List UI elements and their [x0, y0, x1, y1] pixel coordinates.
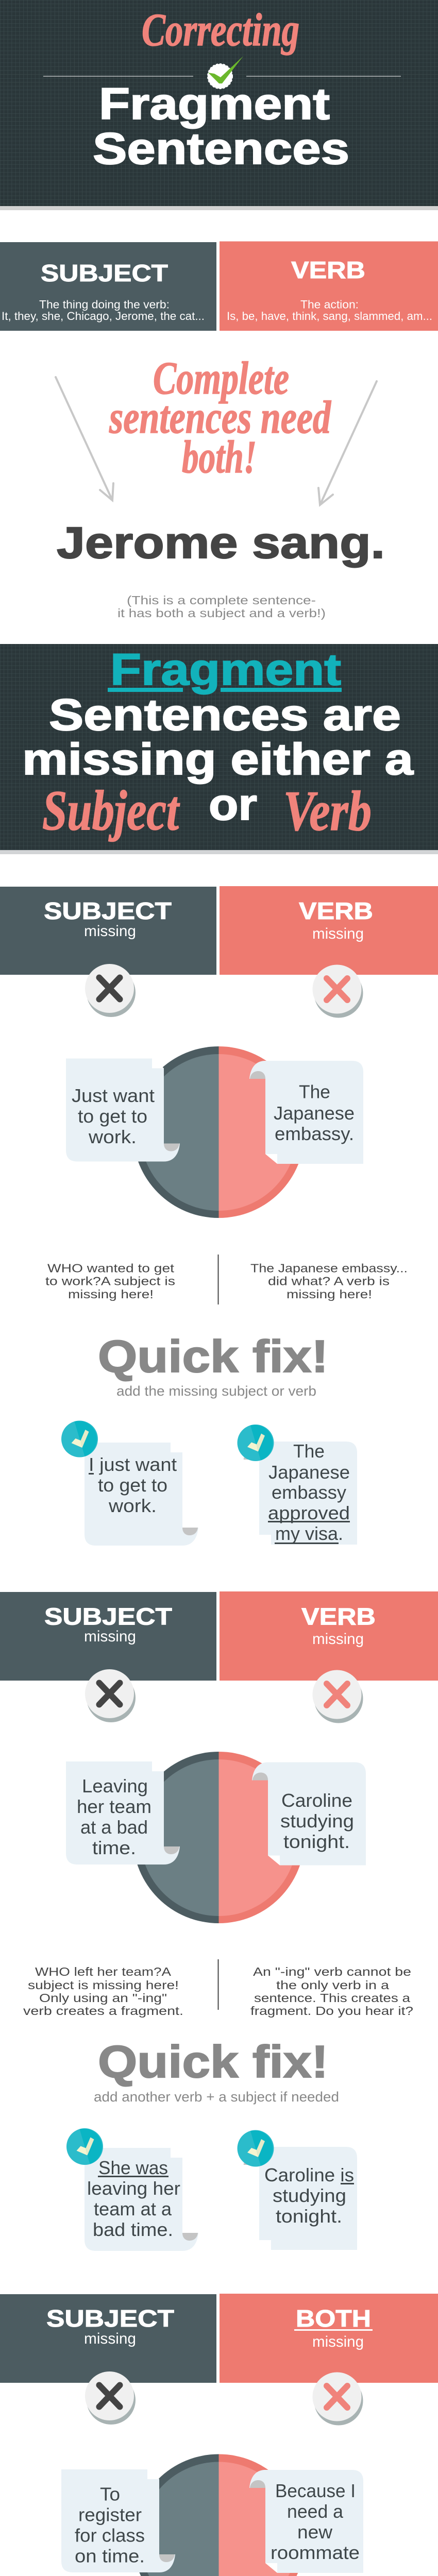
icon: teal check	[61, 1421, 98, 1457]
icon: x dark	[85, 2371, 136, 2425]
note: because I need a new roommate: need a	[287, 2501, 344, 2522]
heading text: Sentences are	[49, 690, 401, 740]
panel: subject missing 1	[0, 887, 216, 975]
fixed note: Caroline is studying tonight	[243, 2147, 357, 2250]
note: to register for class on time: To	[100, 2484, 120, 2505]
note: Caroline studying tonight: studying	[280, 1810, 354, 1832]
caption: who wanted to get to work: missing here!	[68, 1287, 154, 1301]
caption: an -ing verb cannot be the only verb: sentence. This creates a	[254, 1991, 410, 2005]
divider badge with green check	[43, 56, 401, 89]
caption: who wanted to get to work: WHO wanted to get	[47, 1261, 175, 1275]
panel: subject definition: The thing doing the verb:	[39, 298, 170, 311]
fixed note: she was leaving her team at a bad time: She was	[98, 2157, 168, 2178]
fixed note: she was leaving her team at a bad time: leaving her	[87, 2178, 180, 2199]
caption: an -ing verb cannot be the only verb	[250, 1965, 413, 2018]
note: because I need a new roommate: Because I	[275, 2480, 356, 2501]
panel: both missing: BOTH	[296, 2305, 371, 2332]
fixed note: the Japanese embassy approved my visa: my visa.	[275, 1523, 343, 1544]
panel: both missing	[220, 2294, 438, 2383]
caption: the Japanese embassy did what: did what? A verb is	[268, 1275, 390, 1288]
note: the Japanese embassy	[249, 1061, 363, 1164]
caption: who left her team: WHO left her team?A	[35, 1965, 172, 1978]
text: add another verb and a subject if needed: add another verb + a subject if needed	[94, 2089, 339, 2105]
heading text	[22, 690, 414, 784]
caption: who left her team: Only using an "-ing"	[39, 1991, 167, 2005]
fixed note: the Japanese embassy approved my visa	[243, 1440, 357, 1545]
caption: an -ing verb cannot be the only verb: fragment. Do you hear it?	[250, 2004, 413, 2018]
fixed note: Caroline is studying tonight: tonight.	[276, 2206, 342, 2227]
note: because I need a new roommate: new	[297, 2521, 333, 2543]
heading word: Fragment underlined: Fragment	[110, 645, 341, 694]
title: Correcting: Correcting	[142, 5, 299, 56]
heading: complete sentences need both: sentences need	[109, 392, 332, 443]
note: just want to get to work: work.	[88, 1126, 137, 1147]
panel: subject definition	[0, 242, 216, 331]
note: the Japanese embassy: Japanese	[274, 1103, 355, 1124]
note: leaving her team at a bad time	[66, 1761, 180, 1865]
fixed note: the Japanese embassy approved my visa: Japanese	[268, 1462, 350, 1483]
note: to register for class on time	[61, 2469, 175, 2572]
caption: who left her team: subject is missing here!	[28, 1978, 179, 1992]
panel: subject missing 2: SUBJECT	[44, 1603, 172, 1630]
note: leaving her team at a bad time: her team	[77, 1796, 151, 1817]
icon: x coral	[312, 2372, 363, 2426]
panel: subject missing 3: missing	[84, 2330, 136, 2347]
icon: teal check	[66, 2128, 103, 2165]
fixed note: she was leaving her team at a bad time: bad time.	[93, 2219, 173, 2240]
panel: verb definition	[220, 241, 438, 331]
heading: complete sentences need both	[109, 353, 332, 483]
panel: both missing: missing	[312, 2333, 364, 2350]
fixed note: I just want to get to work: I just want	[89, 1454, 177, 1475]
example sentence: Jerome sang: Jerome sang.	[57, 518, 385, 568]
note: Caroline studying tonight: tonight.	[283, 1831, 350, 1852]
note: leaving her team at a bad time: Leaving	[82, 1775, 148, 1797]
caption: an -ing verb cannot be the only verb: An "-ing" verb cannot be	[253, 1965, 411, 1978]
heading: quick fix 2: Quick fix!	[98, 2036, 328, 2087]
panel: subject missing 3	[0, 2294, 216, 2383]
note: this is a complete sentence: (This is a complete sentence-	[127, 594, 316, 607]
caption: who wanted to get to work: to work?A subject is	[45, 1275, 175, 1288]
panel: subject missing 2	[0, 1592, 216, 1681]
arrow: right	[318, 381, 377, 505]
heading text: missing either a	[22, 735, 414, 784]
fixed note: Caroline is studying tonight: Caroline is	[264, 2164, 354, 2185]
note: the Japanese embassy: The	[299, 1081, 330, 1103]
caption: the Japanese embassy did what: missing here!	[287, 1287, 372, 1301]
icon: x dark	[85, 1669, 136, 1722]
note: to register for class on time: on time.	[75, 2546, 145, 2567]
title: Fragment Sentences	[93, 79, 349, 174]
note: just want to get to work	[66, 1058, 180, 1161]
panel: subject missing 2: missing	[84, 1628, 136, 1645]
note: Caroline studying tonight: Caroline	[281, 1790, 352, 1811]
split circle 1	[133, 1046, 305, 1218]
fixed note: the Japanese embassy approved my visa: embassy	[272, 1482, 346, 1503]
panel: subject definition: SUBJECT	[41, 260, 168, 286]
note: because I need a new roommate	[249, 2470, 363, 2576]
icon: teal check	[237, 1425, 274, 1461]
fixed note: Caroline is studying tonight: studying	[273, 2185, 346, 2206]
caption: an -ing verb cannot be the only verb: the only verb in a	[276, 1978, 389, 1992]
fixed note: the Japanese embassy approved my visa: approved	[268, 1502, 350, 1523]
note: just want to get to work: Just want	[72, 1085, 155, 1106]
panel: verb missing 2: VERB	[301, 1603, 376, 1630]
heading word: or: or	[209, 780, 257, 829]
title: Fragment Sentences: Fragment	[99, 79, 330, 129]
fixed note: she was leaving her team at a bad time: team at a	[94, 2198, 172, 2219]
icon: x dark	[85, 964, 136, 1017]
caption: the Japanese embassy did what	[250, 1261, 408, 1301]
text: add the missing subject or verb: add the missing subject or verb	[116, 1383, 316, 1399]
panel: fragment definition heading	[0, 644, 438, 854]
title: Fragment Sentences: Sentences	[93, 124, 349, 174]
panel: verb missing 2: missing	[312, 1631, 364, 1648]
header panel	[0, 0, 438, 210]
icon: x coral	[312, 964, 363, 1018]
caption: who left her team	[23, 1965, 183, 2018]
note: leaving her team at a bad time: at a bad	[80, 1817, 148, 1838]
fixed note: I just want to get to work	[85, 1443, 198, 1546]
panel: verb missing 1: VERB	[299, 897, 373, 924]
note: Caroline studying tonight	[252, 1762, 366, 1865]
caption: who left her team: verb creates a fragment.	[23, 2004, 183, 2018]
note: leaving her team at a bad time: time.	[92, 1837, 136, 1858]
panel: subject missing 1: SUBJECT	[44, 897, 172, 924]
arrow: left	[56, 377, 113, 500]
note: to register for class on time: for class	[75, 2525, 145, 2546]
heading: complete sentences need both: both!	[182, 432, 257, 483]
panel: verb missing 2	[220, 1591, 438, 1681]
panel: verb missing 1	[220, 886, 438, 975]
note: just want to get to work: to get to	[78, 1106, 147, 1127]
split circle 2	[133, 1752, 305, 1923]
heading word: Subject: Subject	[42, 779, 180, 842]
icon: teal check	[237, 2130, 274, 2167]
fixed note: I just want to get to work: work.	[108, 1495, 157, 1516]
icon: x coral	[312, 1670, 363, 1723]
fixed note: the Japanese embassy approved my visa: The	[293, 1440, 325, 1462]
note: this is a complete sentence	[117, 594, 326, 620]
panel: subject missing 1: missing	[84, 923, 136, 940]
caption: who wanted to get to work	[45, 1261, 175, 1301]
note: to register for class on time: register	[78, 2504, 142, 2526]
fixed note: she was leaving her team at a bad time	[85, 2148, 198, 2251]
panel: verb definition: VERB	[291, 257, 365, 283]
heading: quick fix 1: Quick fix!	[98, 1331, 328, 1382]
heading: complete sentences need both: Complete	[153, 353, 289, 404]
panel: subject missing 3: SUBJECT	[46, 2305, 174, 2332]
panel: subject definition: It, they, she, Chicago, Jerome, the cat...	[2, 310, 205, 323]
panel: verb definition: Is, be, have, think, sang, slammed, am...	[227, 310, 432, 323]
split circle 3	[133, 2454, 305, 2576]
note: because I need a new roommate: roommate	[271, 2542, 360, 2563]
panel: verb missing 1: missing	[312, 925, 364, 942]
note: this is a complete sentence: it has both a subject and a verb!)	[117, 606, 326, 620]
heading word: Verb: Verb	[283, 779, 372, 842]
caption: the Japanese embassy did what: The Japanese embassy...	[250, 1261, 408, 1275]
note: the Japanese embassy: embassy.	[275, 1123, 354, 1144]
fixed note: I just want to get to work: to get to	[98, 1475, 167, 1496]
panel: verb definition: The action:	[300, 298, 359, 311]
